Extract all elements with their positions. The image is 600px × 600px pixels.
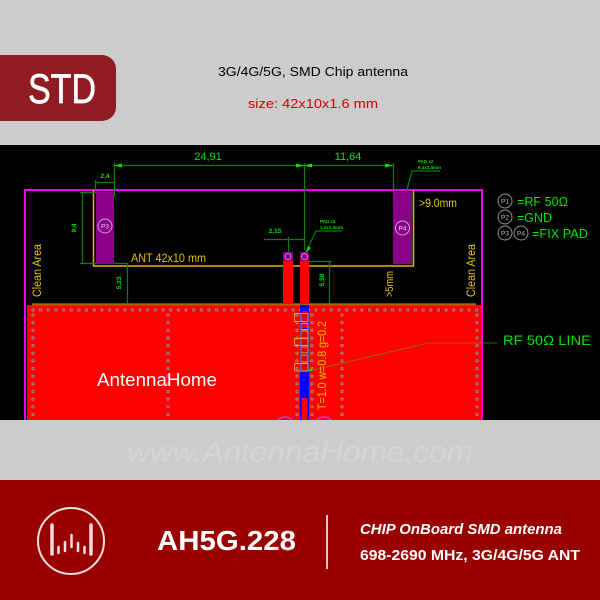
footer panel [0,480,600,600]
ground edge line [32,304,476,305]
pin legend: P2 [501,214,509,222]
dimension lines [80,163,440,304]
clearance outline [25,190,482,420]
STD badge [0,55,116,121]
yellow annotations: >9.0mm [419,198,457,210]
product description: 698-2690 MHz, 3G/4G/5G ANT [360,547,580,564]
dimension labels: 2,4 [100,173,110,180]
yellow annotations [32,198,478,410]
brand label on ground plane: AntennaHome [97,370,217,390]
pad P3 [96,192,114,264]
pin legend: P1 [501,198,509,206]
ground plane with vias [27,305,481,420]
yellow annotations: >5mm [384,271,396,297]
model number: AH5G.228 [157,525,296,556]
dimension labels: 9.4x2.4mm [418,165,441,170]
feed pads [283,252,309,304]
pad P4: P4 [399,226,407,232]
pin legend: P3 [501,230,509,238]
yellow annotations: Clean Area [32,243,44,297]
dimension labels [71,151,441,289]
product description: CHIP OnBoard SMD antenna [360,521,562,538]
dimension labels: PAD x2 [320,219,336,224]
icon: signal logo [38,508,104,574]
pin legend: =RF 50Ω [517,194,568,209]
RF feed line [294,305,309,420]
dimension labels: PAD x2 [418,159,434,164]
pin legend: P4 [517,230,525,238]
heading: product type: 3G/4G/5G, SMD Chip antenna [218,64,409,79]
watermark: www.AntennaHome.com [127,436,473,469]
dimension labels: 9,4 [71,223,78,233]
RF line callout: RF 50Ω LINE [503,332,591,348]
pad P3: P3 [101,224,109,230]
divider [326,515,328,569]
STD badge: STD [28,65,96,112]
dimension labels: 5,58 [319,273,326,286]
RF line leader [307,343,497,371]
dimension labels: 11,64 [335,151,361,163]
antenna keep-out outline [94,190,414,266]
dimension labels: 24,91 [194,151,222,163]
panel: PCB layout drawing [0,145,600,437]
pin legend [498,194,588,241]
yellow annotations: ANT 42x10 mm [131,253,206,265]
dimension arrows [114,164,393,253]
size line: size: 42x10x1.6 mm [248,96,378,111]
dimension labels: 5,23 [116,276,123,289]
dimension labels: 1.2x1.2mm [320,225,343,230]
dimension labels: 2,15 [269,228,282,235]
stitching arcs [276,416,332,420]
product description [360,521,580,564]
pin legend: =GND [517,210,552,225]
pad P4 [393,192,412,264]
yellow annotations: T=1.0 w=0.8 g=0.2 [317,321,329,410]
yellow annotations: Clean Area [466,243,478,297]
header panel [0,55,409,121]
pin legend: =FIX PAD [532,226,588,241]
